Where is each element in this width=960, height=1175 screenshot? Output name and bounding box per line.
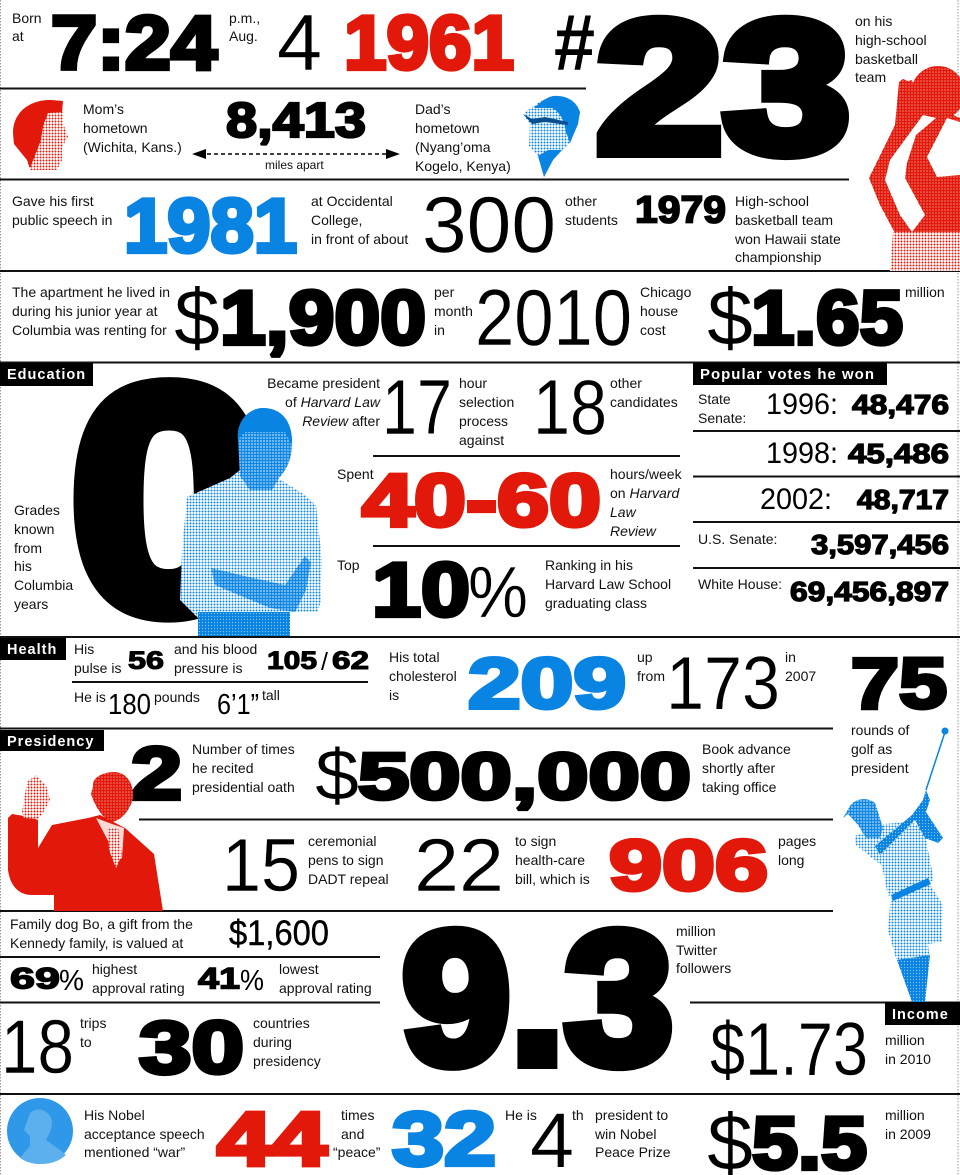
text: state senate: State <box>698 391 731 407</box>
row: White House: 69,456,897 <box>790 576 949 607</box>
text: president to win Nobel: president to <box>595 1107 668 1123</box>
text: nobel speech: His Nobel <box>84 1107 145 1123</box>
number: $1.65: 1.65 <box>751 276 903 361</box>
text: times and peace: times <box>341 1107 374 1123</box>
number: 209: 209 <box>468 645 626 724</box>
text: apartment rent: Columbia was renting for <box>12 322 167 338</box>
text: dad's hometown: Dad’s <box>415 101 451 117</box>
heading: presidency: Presidency <box>7 734 94 750</box>
number: $500,000: $ <box>315 736 359 816</box>
number: $1,900: 1,900 <box>220 276 426 361</box>
text: he is: He is <box>505 1107 537 1123</box>
panel: popular votes <box>693 363 949 607</box>
text: president to win Nobel: win Nobel <box>594 1126 656 1142</box>
number: 4: 4 <box>277 0 322 87</box>
panel: apartment and house cost <box>12 273 945 362</box>
panel: income <box>707 1002 960 1175</box>
text: other candidates: other <box>610 375 642 391</box>
text: president to win Nobel: Peace Prize <box>595 1144 671 1160</box>
heading: income: Income <box>892 1007 949 1023</box>
number: 10%: % <box>468 553 528 633</box>
text: per month in: month <box>434 303 473 319</box>
text: his pulse is: His <box>74 641 94 657</box>
text: Chicago house cost: house <box>640 303 678 319</box>
heading: popular votes he won <box>693 363 887 385</box>
text: million in 2010: in 2010 <box>885 1051 931 1067</box>
number: zero grades: 0 <box>70 320 268 678</box>
text: number of times: Number of times <box>192 741 295 757</box>
text: Harvard Law Review president: Became president <box>267 375 380 391</box>
number: 8,413: 8,413 <box>226 94 366 148</box>
text: million twitter followers: million <box>676 923 716 939</box>
number: $1.73: $1.73 <box>710 1007 868 1091</box>
number: 40-60: 40-60 <box>362 459 601 542</box>
text: in 2007: in <box>785 649 796 665</box>
text: pounds: pounds <box>154 689 200 705</box>
text: times and peace: “peace” <box>333 1144 381 1160</box>
heading: health <box>0 638 66 660</box>
text: p.m., Aug.: Aug. <box>229 28 258 44</box>
row: White House: White House: <box>698 576 782 592</box>
text: hours per week: Law <box>610 504 637 520</box>
text: grades known: Columbia <box>14 577 73 593</box>
text: book advance: taking office <box>702 779 777 795</box>
text: nobel speech: acceptance speech <box>84 1126 205 1142</box>
number: $1.65: $ <box>707 273 753 362</box>
text: Chicago house cost: Chicago <box>640 284 691 300</box>
text: other students: students <box>565 212 618 228</box>
row: White House <box>698 576 949 607</box>
panel: presidency <box>0 730 816 1103</box>
number: 69%: % <box>59 965 84 997</box>
panel: parents' hometowns <box>13 94 580 177</box>
text: grades known: from <box>14 540 42 556</box>
number: 105 / 62: 105 <box>267 647 317 675</box>
text: mom's hometown: (Wichita, Kans.) <box>83 139 182 155</box>
number: $500,000 <box>315 736 691 816</box>
number: 41%: % <box>240 965 264 997</box>
text: on his high-school basketball team: team <box>855 69 886 85</box>
number: 2: 2 <box>131 732 182 815</box>
text: blood pressure: pressure is <box>174 660 242 676</box>
icon: dad portrait <box>523 96 580 177</box>
number: 15: 15 <box>222 823 300 907</box>
panel: golf <box>843 645 948 1002</box>
text: Chicago house cost: cost <box>640 322 666 338</box>
number: 18 trips: 18 <box>1 1005 74 1090</box>
icon: young Obama portrait <box>180 408 322 636</box>
text: million in 2009: million <box>885 1107 925 1123</box>
text: ranking: graduating class <box>545 595 647 611</box>
heading: education: Education <box>7 367 86 383</box>
panel: Nobel <box>7 1096 671 1175</box>
text: pages long: long <box>778 852 804 868</box>
text: countries: during <box>253 1034 292 1050</box>
text: million twitter followers: followers <box>676 960 731 976</box>
text: th: th <box>572 1107 584 1123</box>
number: 105 / 62: / <box>321 648 328 676</box>
number: 173: 173 <box>666 641 780 725</box>
text: on his high-school basketball team: on his <box>855 13 892 29</box>
row: 1998: 1998: <box>766 437 838 470</box>
text: gave his first public speech in: Gave his first <box>12 193 94 209</box>
text: million twitter followers: Twitter <box>676 942 718 958</box>
text: on his high-school basketball team: high-school <box>855 32 927 48</box>
number: 1981: 1981 <box>124 184 297 269</box>
heading: popular votes he won: Popular votes he won <box>700 367 875 383</box>
text: pages long: pages <box>778 833 816 849</box>
text: dad's hometown: hometown <box>415 120 480 136</box>
text: highest approval: highest <box>92 961 137 977</box>
text: spent: Spent <box>337 466 374 482</box>
arrow: distance between towns <box>192 149 400 159</box>
text: on his high-school basketball team: basketball <box>855 51 918 67</box>
icon: basketball player <box>869 66 960 271</box>
text: apartment rent: The apartment he lived in <box>12 284 170 300</box>
number: 30: 30 <box>139 1006 244 1089</box>
number: 69% <box>10 962 84 997</box>
text: per month in: in <box>434 322 445 338</box>
panel: number 23 <box>554 0 960 271</box>
number: 2010: 2010 <box>475 273 632 362</box>
row: 1998: 45,486 <box>848 438 949 469</box>
text: rounds of golf: president <box>851 760 909 776</box>
text: million: million <box>905 284 945 300</box>
text: up from: up <box>637 649 653 665</box>
text: ceremonial pens: pens to sign <box>308 852 384 868</box>
text: highest approval: approval rating <box>92 980 185 996</box>
number: 906: 906 <box>609 827 768 906</box>
number: 9.3: 9.3 <box>402 893 673 1103</box>
panel: health <box>0 638 816 725</box>
number: 180: 180 <box>108 689 151 721</box>
text: rounds of golf: rounds of <box>851 722 909 738</box>
number: 105 / 62 <box>267 647 369 676</box>
text: state championship: won Hawaii state <box>734 231 841 247</box>
text: hours per week: hours/week <box>610 466 682 482</box>
text: trips to: to <box>80 1034 92 1050</box>
text: his pulse is: pulse is <box>74 660 121 676</box>
number: 56: 56 <box>128 647 164 675</box>
text: to sign health-care bill: to sign <box>515 833 556 849</box>
icon: mom portrait <box>13 100 68 170</box>
text: trips to: trips <box>80 1015 106 1031</box>
text: family dog: Family dog Bo, a gift from the <box>10 916 193 932</box>
number: 69%: 69 <box>10 962 60 996</box>
text: state championship: High-school <box>735 193 809 209</box>
text: mom's hometown: hometown <box>83 120 148 136</box>
text: blood pressure: and his blood <box>174 641 257 657</box>
text: up from: from <box>637 668 665 684</box>
number: 105 / 62: 62 <box>332 647 369 675</box>
text: hours per week: Review <box>610 523 657 539</box>
text: p.m., Aug.: p.m., <box>229 10 260 26</box>
text: to sign health-care bill: bill, which is <box>515 871 590 887</box>
text: grades known: his <box>14 558 32 574</box>
number: $500,000: 500,000 <box>358 739 691 813</box>
heading: education <box>0 363 93 386</box>
text: total cholesterol: is <box>389 687 399 703</box>
text: number of times: presidential oath <box>192 779 295 795</box>
number: $1,600: $1,600 <box>229 914 329 953</box>
number: 10% <box>372 548 528 633</box>
text: dad's hometown: (Nyang’oma <box>415 139 491 155</box>
text: at Occidental College: at Occidental <box>311 193 393 209</box>
text: born at: Born <box>12 10 42 26</box>
text: number of times: he recited <box>192 760 253 776</box>
row: 2002: 2002: <box>760 483 832 516</box>
text: at Occidental College: in front of about <box>311 231 408 247</box>
text: tall: tall <box>262 687 280 703</box>
text: nobel speech: mentioned “war” <box>84 1144 185 1160</box>
text: rounds of golf: golf as <box>851 741 892 757</box>
text: hour selection process against: against <box>459 432 504 448</box>
text: ceremonial pens: DADT repeal <box>308 871 389 887</box>
text: grades known: known <box>14 521 54 537</box>
number: 1961: 1961 <box>344 1 514 86</box>
text: per month in: per <box>434 284 454 300</box>
text: book advance: shortly after <box>702 760 775 776</box>
text: hour selection process against: selection <box>459 394 514 410</box>
row: U.S. Senate <box>698 529 949 560</box>
number: 22: 22 <box>414 823 504 907</box>
number: 41% <box>198 962 264 997</box>
text: family dog: Kennedy family, is valued at <box>10 935 183 951</box>
heading: presidency <box>0 730 104 751</box>
text: ranking: Ranking in his <box>545 557 633 573</box>
text: hour selection process against: hour <box>459 375 487 391</box>
row: 2002: 48,717 <box>857 484 949 515</box>
number: 6 feet 1 inch: 6’1” <box>217 689 259 721</box>
number: 300: 300 <box>422 180 556 269</box>
text: top: Top <box>337 557 360 573</box>
number: 10%: 10 <box>372 548 470 633</box>
text: state senate: Senate: <box>698 410 746 426</box>
text: ceremonial pens: ceremonial <box>308 833 376 849</box>
text: million in 2010: million <box>885 1032 925 1048</box>
icon: Nobel medal <box>7 1098 73 1164</box>
icon: Obama taking the oath <box>8 772 163 911</box>
text: million in 2009: in 2009 <box>885 1126 931 1142</box>
text: other students: other <box>565 193 597 209</box>
row: 1996 <box>766 388 949 421</box>
row: 2002 <box>760 483 949 516</box>
row: 1996: 48,476 <box>852 389 949 420</box>
text: miles apart: miles apart <box>265 158 324 172</box>
text: dad's hometown: Kogelo, Kenya) <box>415 158 511 174</box>
text: grades known: Grades <box>14 502 60 518</box>
text: other candidates: candidates <box>610 394 678 410</box>
heading: health: Health <box>7 642 57 658</box>
text: Harvard Law Review president: Review after <box>302 413 380 429</box>
heading: income <box>885 1002 960 1025</box>
text: apartment rent: during his junior year at <box>12 303 158 319</box>
text: hour selection process against: process <box>459 413 508 429</box>
text: at Occidental College: College, <box>311 212 362 228</box>
text: state championship: basketball team <box>735 212 833 228</box>
row: 1996: 1996: <box>766 388 838 421</box>
number: $5.5 <box>707 1098 867 1175</box>
text: born at: at <box>12 28 24 44</box>
text: grades known: years <box>14 596 48 612</box>
text: total cholesterol: His total <box>389 649 440 665</box>
number: 75: 75 <box>851 645 947 724</box>
row: 1998 <box>766 437 949 470</box>
text: book advance: Book advance <box>702 741 791 757</box>
text: gave his first public speech in: public speech in <box>12 212 112 228</box>
text: lowest approval: lowest <box>279 961 319 977</box>
panel: first speech <box>12 180 841 269</box>
number: $1,900: $ <box>174 273 220 362</box>
text: he is: He is <box>74 689 106 705</box>
number: 41%: 41 <box>198 962 240 996</box>
panel: education <box>0 320 683 678</box>
text: ranking: Harvard Law School <box>545 576 671 592</box>
text: countries: countries <box>253 1015 310 1031</box>
icon: golfer <box>843 728 948 1002</box>
text: total cholesterol: cholesterol <box>389 668 457 684</box>
panel: birth time <box>12 0 514 87</box>
text: Harvard Law Review president: of Harvard Law <box>285 394 380 410</box>
text: in 2007: 2007 <box>785 668 816 684</box>
text: lowest approval: approval rating <box>279 980 372 996</box>
number: hash sign: # <box>554 0 595 87</box>
text: times and peace: and <box>341 1126 364 1142</box>
text: countries: presidency <box>253 1053 321 1069</box>
number: 7:24: 7:24 <box>51 1 217 86</box>
text: state championship: championship <box>735 249 822 265</box>
row: U.S. Senate: 3,597,456 <box>811 529 949 560</box>
number: 18: 18 <box>533 363 607 451</box>
text: mom's hometown: Mom’s <box>83 101 124 117</box>
number: 17: 17 <box>382 363 452 451</box>
row: U.S. Senate: U.S. Senate: <box>698 531 777 547</box>
text: to sign health-care bill: health-care <box>515 852 585 868</box>
number: 1979: 1979 <box>635 190 726 232</box>
text: hours per week: on Harvard <box>610 485 679 501</box>
